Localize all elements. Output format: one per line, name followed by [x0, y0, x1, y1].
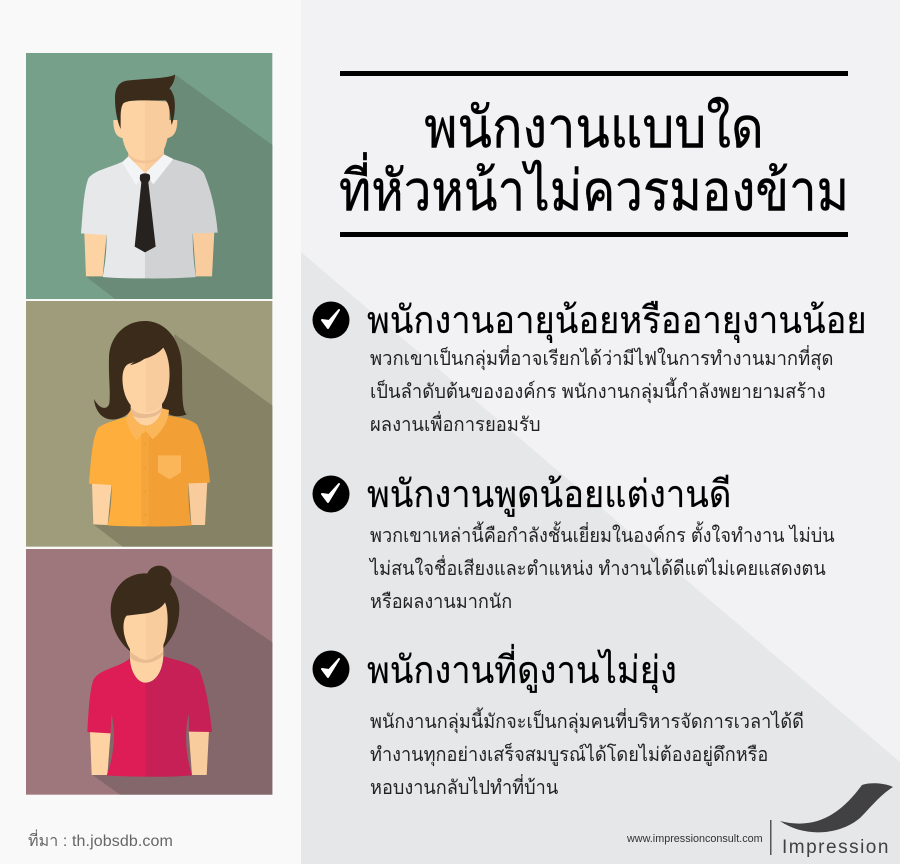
logo: Impression — [770, 783, 893, 858]
source credit: ที่มา : th.jobsdb.com — [28, 833, 173, 850]
text block 2: ไม่สนใจชื่อเสียงและตำแหน่ง ทำงานได้ดีแต่ไม่เคยแสดงตน — [370, 558, 826, 580]
website url: www.impressionconsult.com — [627, 833, 763, 845]
text block 1: ผลงานเพื่อการยอมรับ — [370, 414, 541, 436]
text block 2: พวกเขาเหล่านี้คือกำลังชั้นเยี่ยมในองค์กร ตั้งใจทำงาน ไม่บ่น — [370, 525, 835, 547]
text block 3: ทำงานทุกอย่างเสร็จสมบูรณ์ได้โดยไม่ต้องอยู่ดึกหรือ — [370, 744, 768, 766]
text block 1: พวกเขาเป็นกลุ่มที่อาจเรียกได้ว่ามีไฟในการทำงานมากที่สุด — [370, 348, 833, 370]
text block 1: เป็นลำดับต้นขององค์กร พนักงานกลุ่มนี้กำลังพยายามสร้าง — [370, 381, 826, 403]
text block 3: พนักงานกลุ่มนี้มักจะเป็นกลุ่มคนที่บริหารจัดการเวลาได้ดี — [370, 711, 804, 733]
text block 3: หอบงานกลับไปทำที่บ้าน — [370, 777, 558, 799]
logo: Impression: Impression — [782, 837, 890, 858]
panel: woman with shoulder-length hair — [26, 301, 272, 547]
text block 2 — [368, 521, 835, 613]
panel: woman with hair bun — [26, 549, 272, 795]
text block 3 — [370, 707, 804, 799]
text block 2: หรือผลงานมากนัก — [370, 591, 512, 613]
text block 1 — [370, 345, 833, 436]
icon: check 1 — [312, 302, 350, 338]
title: ที่หัวหน้าไม่ควรมองข้าม — [339, 159, 849, 222]
icon: check 2 — [312, 476, 350, 512]
heading 1: พนักงานอายุน้อยหรืออายุงานน้อย — [367, 300, 867, 342]
icon: check 3 — [312, 650, 350, 688]
heading 3: พนักงานที่ดูงานไม่ยุ่ง — [367, 650, 677, 692]
title: พนักงานแบบใด — [424, 96, 764, 159]
heading 2: พนักงานพูดน้อยแต่งานดี — [367, 474, 731, 516]
panel: man portrait — [26, 53, 272, 299]
title — [339, 71, 849, 237]
